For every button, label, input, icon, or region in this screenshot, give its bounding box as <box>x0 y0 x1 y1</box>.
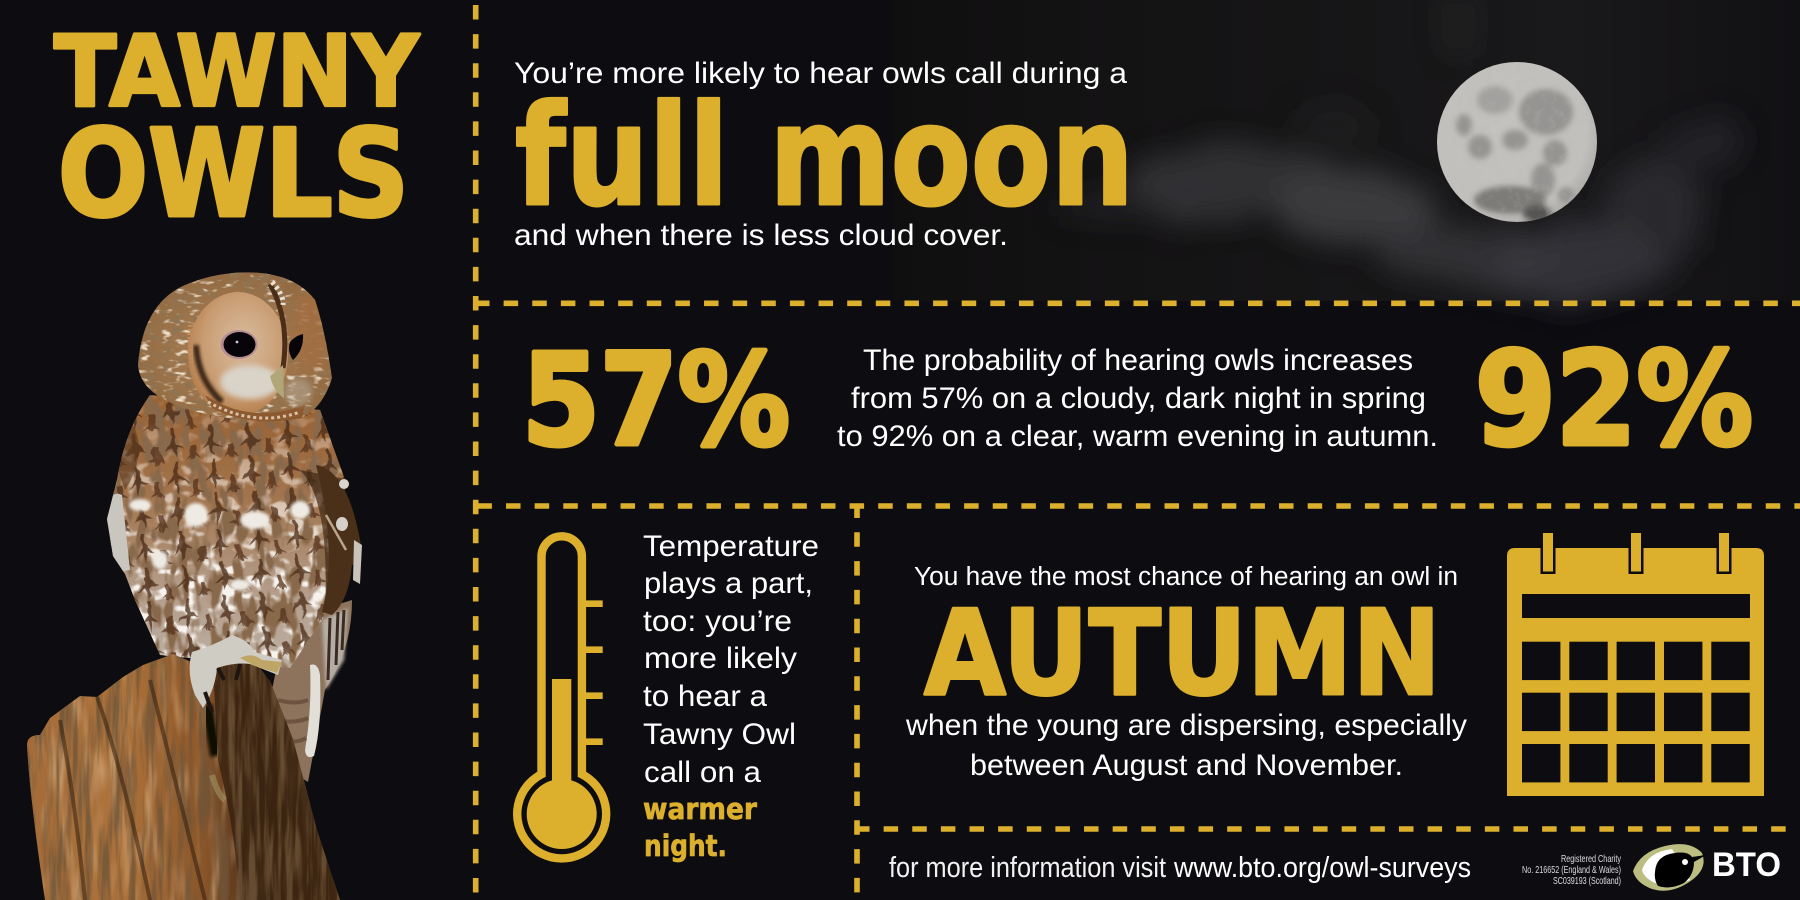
footer link text <box>889 852 1471 884</box>
eye: right <box>289 334 303 360</box>
logo: BTO <box>1633 844 1781 891</box>
stat: 92%: 92% <box>1475 325 1753 475</box>
charity registration text: Registered Charity <box>1561 853 1622 865</box>
text: probability: The probability of hearing owls increases <box>863 344 1413 377</box>
stat: 57%: 57% <box>522 326 790 474</box>
text: temperature: more likely <box>644 642 797 675</box>
text: full moon: You’re more likely to hear owls call during a <box>514 57 1127 90</box>
text: autumn: AUTUMN <box>924 584 1441 722</box>
charity registration text <box>1522 853 1622 887</box>
text: temperature: plays a part, <box>644 567 813 600</box>
photo: owl on stump <box>20 265 362 900</box>
tail <box>270 600 352 782</box>
title: OWLS <box>58 106 409 244</box>
eye: left <box>220 330 258 359</box>
feet <box>190 635 282 712</box>
text: temperature: warmer <box>643 792 758 826</box>
text: probability: to 92% on a clear, warm evening in autumn. <box>837 420 1438 453</box>
icon: thermometer <box>517 536 606 858</box>
footer link text: for more information visit <box>889 852 1166 884</box>
text: full moon: full moon <box>515 75 1134 237</box>
text: probability: from 57% on a cloudy, dark night in spring <box>851 382 1426 415</box>
text: probability <box>837 344 1438 453</box>
title: TAWNY <box>54 16 420 130</box>
text: temperature <box>643 530 819 863</box>
panel: night sky photo with moon <box>1050 0 1756 314</box>
beak <box>270 365 284 398</box>
body plumage <box>107 395 345 668</box>
text: temperature: Temperature <box>643 530 819 563</box>
head <box>138 272 332 422</box>
text: temperature: night. <box>644 829 727 863</box>
charity registration text: SC039193 (Scotland) <box>1553 875 1621 887</box>
clouds <box>1060 0 1750 298</box>
text: autumn: when the young are dispersing, especially <box>905 709 1467 742</box>
text: autumn <box>905 563 1467 782</box>
brow ridge <box>270 284 285 368</box>
icon: calendar <box>1507 533 1764 796</box>
moon <box>1437 62 1598 223</box>
text: temperature: too: you’re <box>643 605 792 638</box>
dashed dividers <box>475 5 1800 900</box>
stump <box>20 650 345 900</box>
wing <box>316 465 362 615</box>
text: autumn: You have the most chance of hearing an owl in <box>914 563 1458 591</box>
logo: BTO: BTO <box>1712 846 1781 884</box>
face disc <box>188 292 305 421</box>
text: temperature: Tawny Owl <box>643 718 796 751</box>
footer link text: www.bto.org/owl-surveys <box>1173 852 1471 884</box>
charity registration text: No. 216652 (England & Wales) <box>1522 864 1621 876</box>
text: full moon: and when there is less cloud cover. <box>514 219 1008 252</box>
text: temperature: to hear a <box>643 680 767 713</box>
title <box>54 16 420 244</box>
text: autumn: between August and November. <box>970 749 1403 782</box>
text: temperature: call on a <box>644 756 761 789</box>
